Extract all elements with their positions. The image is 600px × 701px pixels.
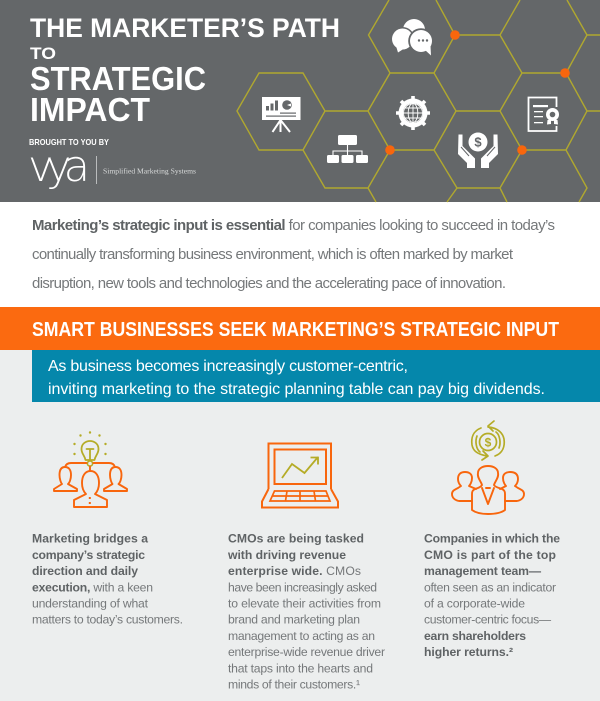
icon: hands with coin: $	[474, 134, 482, 150]
icon: people and lightbulb	[54, 431, 127, 507]
icon: team and money cycle	[452, 421, 524, 514]
column: shareholder returns: of a corporate-wide	[424, 596, 525, 610]
icon: speech bubbles	[390, 19, 434, 56]
column: driving revenue	[227, 532, 385, 692]
title: IMPACT	[30, 91, 150, 128]
title: STRATEGIC	[30, 60, 206, 97]
title: TO	[30, 44, 56, 63]
icon: presentation board	[262, 97, 300, 132]
logo: vya: Simplified Marketing Systems	[103, 168, 196, 176]
intro text: Marketing’s strategic input is essential for companies looking to succeed in today’s	[32, 217, 555, 234]
column: driving revenue: that taps into the hearts and	[228, 661, 373, 675]
title: THE MARKETER’S PATH	[30, 13, 340, 43]
column: strategic direction	[32, 532, 183, 627]
column: strategic direction: Marketing bridges a	[32, 532, 148, 546]
column: strategic direction: company’s strategic	[32, 548, 145, 562]
column: shareholder returns: earn shareholders	[424, 629, 526, 643]
banner: customer-centric: inviting marketing to the strategic planning table can pay big dividends.	[48, 381, 545, 398]
column: driving revenue: with driving revenue	[227, 548, 346, 562]
intro text: continually transforming business environment, which is often marked by market	[32, 246, 514, 263]
banner: customer-centric	[32, 350, 600, 402]
background: lower section	[0, 349, 600, 701]
column: shareholder returns: often seen as an indicator	[424, 580, 556, 594]
column: driving revenue: enterprise wide. CMOs	[228, 564, 361, 578]
icon: org chart	[327, 135, 368, 163]
column: shareholder returns: CMO is part of the top	[424, 548, 556, 562]
icon: team and money cycle: $	[485, 436, 492, 450]
column: shareholder returns: higher returns.²	[424, 645, 513, 659]
banner: customer-centric: As business becomes increasingly customer-centric,	[48, 358, 408, 375]
icon: globe gear	[396, 96, 430, 130]
banner: smart businesses	[0, 307, 600, 350]
icon: hands with coin	[458, 132, 498, 168]
intro text	[32, 217, 555, 292]
panel: header	[0, 0, 600, 202]
column: driving revenue: CMOs are being tasked	[228, 532, 364, 546]
column: driving revenue: minds of their customers.¹	[228, 678, 360, 692]
column: shareholder returns: Companies in which the	[424, 532, 560, 546]
column: shareholder returns: management team—	[424, 564, 542, 578]
icon: certificate	[528, 98, 559, 131]
title	[30, 13, 340, 128]
column: driving revenue: to elevate their activities from	[228, 596, 381, 610]
column: shareholder returns	[424, 532, 560, 659]
column: driving revenue: management to acting as an	[228, 629, 375, 643]
column: driving revenue: brand and marketing plan	[228, 613, 360, 627]
column: strategic direction: understanding of what	[32, 596, 149, 610]
column: strategic direction: matters to today’s customers.	[32, 613, 183, 627]
column: shareholder returns: customer-centric focus—	[424, 613, 552, 627]
column: strategic direction: execution, with a keen	[32, 580, 153, 594]
logo: vya: vya	[28, 142, 90, 192]
icon: laptop with chart	[262, 444, 338, 508]
brought to you by: BROUGHT TO YOU BY	[29, 137, 109, 147]
column: strategic direction: direction and daily	[32, 564, 138, 578]
column: driving revenue: have been increasingly asked	[228, 580, 377, 594]
logo: vya	[28, 142, 196, 192]
column: driving revenue: enterprise-wide revenue driver	[228, 645, 385, 659]
intro text: disruption, new tools and technologies and the accelerating pace of innovation.	[32, 275, 506, 292]
